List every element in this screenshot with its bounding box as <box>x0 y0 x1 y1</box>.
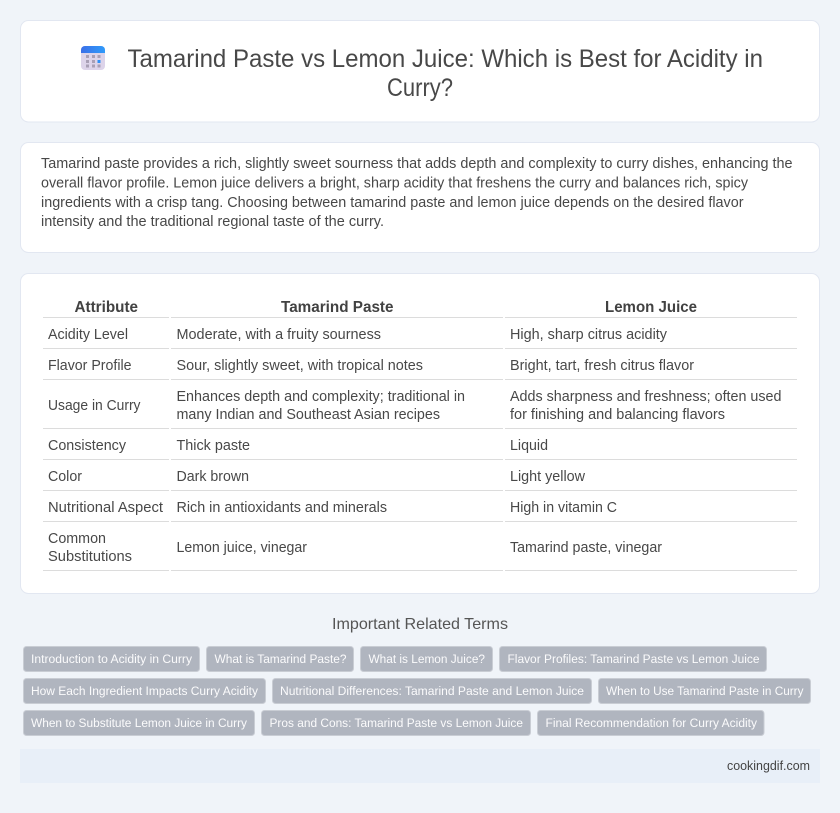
panel: introduction <box>20 142 820 252</box>
footer <box>20 749 820 783</box>
table row: color: Light yellow <box>510 469 585 485</box>
table row: usage in curry: many Indian and Southeast Asian recipes <box>176 407 440 423</box>
table row: consistency <box>43 438 797 460</box>
table row: nutritional aspect <box>43 500 797 522</box>
table row: color <box>43 469 797 491</box>
table row: consistency: Consistency <box>48 438 127 454</box>
panel: header <box>20 20 820 122</box>
table header row: Lemon Juice <box>605 299 697 316</box>
tag <box>24 646 200 672</box>
table header row: Attribute <box>74 299 138 316</box>
table row: usage in curry: Enhances depth and complexity; traditional in <box>176 389 465 405</box>
title <box>128 45 763 102</box>
table row: usage in curry: for finishing and balancing flavors <box>510 407 725 423</box>
table row: color: Dark brown <box>176 469 249 485</box>
table row: nutritional aspect: Rich in antioxidants and minerals <box>176 500 387 516</box>
table row: flavor profile: Sour, slightly sweet, with tropical notes <box>176 358 423 374</box>
tag: Pros and Cons: Tamarind Paste vs Lemon Juice <box>270 716 523 730</box>
table row: flavor profile: Bright, tart, fresh citrus flavor <box>510 358 694 374</box>
table row: common substitutions: Tamarind paste, vinegar <box>510 540 662 556</box>
table header row: Tamarind Paste <box>281 299 394 316</box>
tag <box>500 646 766 672</box>
text block: introduction paragraph <box>41 156 792 230</box>
heading: important related terms: Important Related Terms <box>332 616 508 633</box>
table row: common substitutions: Common <box>48 531 106 547</box>
text block: introduction paragraph: overall flavor profile. Lemon juice delivers a bright, sharp acidity that freshens the curry and balances rich, spicy <box>41 176 749 192</box>
tag: Flavor Profiles: Tamarind Paste vs Lemon Juice <box>508 652 760 666</box>
icon: calendar <box>81 46 105 70</box>
table row: color: Color <box>48 469 82 485</box>
panel: comparison table <box>20 274 820 594</box>
text block: introduction paragraph: ingredients with a crisp tang. Choosing between tamarind paste and lemon juice depends on the desired flavor <box>41 195 744 211</box>
table row: acidity level <box>43 327 797 349</box>
related terms tags <box>24 646 810 736</box>
tag <box>262 710 530 736</box>
table row: usage in curry <box>43 389 797 429</box>
tag <box>598 678 810 704</box>
table row: nutritional aspect: High in vitamin C <box>510 500 617 516</box>
tag: When to Substitute Lemon Juice in Curry <box>31 716 248 730</box>
table row: acidity level: Acidity Level <box>48 327 128 343</box>
table row: flavor profile <box>43 358 797 380</box>
tag <box>538 710 764 736</box>
tag: Introduction to Acidity in Curry <box>31 652 193 666</box>
text block: introduction paragraph: intensity and the traditional regional taste of the curry. <box>41 214 384 230</box>
table row: usage in curry: Adds sharpness and freshness; often used <box>510 389 782 405</box>
table row: acidity level: Moderate, with a fruity sourness <box>176 327 381 343</box>
tag <box>360 646 492 672</box>
tag <box>24 710 254 736</box>
footer: cookingdif.com <box>727 758 810 773</box>
table row: nutritional aspect: Nutritional Aspect <box>48 500 163 516</box>
text block: introduction paragraph: Tamarind paste provides a rich, slightly sweet sourness that adds depth and complexity to curry dishes, enhancing the <box>41 156 792 172</box>
table row: consistency: Thick paste <box>176 438 250 454</box>
table row: consistency: Liquid <box>510 438 548 454</box>
table row: acidity level: High, sharp citrus acidity <box>510 327 668 343</box>
table header row <box>43 299 797 318</box>
table row: usage in curry: Usage in Curry <box>48 398 141 414</box>
title: Curry? <box>387 74 453 102</box>
tag: How Each Ingredient Impacts Curry Acidity <box>31 684 259 698</box>
table row: common substitutions: Lemon juice, vinegar <box>176 540 307 556</box>
tag <box>24 678 266 704</box>
tag <box>272 678 592 704</box>
tag <box>206 646 354 672</box>
tag: What is Tamarind Paste? <box>214 652 347 666</box>
table row: flavor profile: Flavor Profile <box>48 358 132 374</box>
table row: common substitutions: Substitutions <box>48 549 132 565</box>
tag: When to Use Tamarind Paste in Curry <box>606 684 804 698</box>
title: Tamarind Paste vs Lemon Juice: Which is Best for Acidity in <box>128 45 763 73</box>
table row: common substitutions <box>43 531 797 571</box>
tag: Nutritional Differences: Tamarind Paste and Lemon Juice <box>280 684 584 698</box>
tag: What is Lemon Juice? <box>368 652 485 666</box>
tag: Final Recommendation for Curry Acidity <box>546 716 758 730</box>
